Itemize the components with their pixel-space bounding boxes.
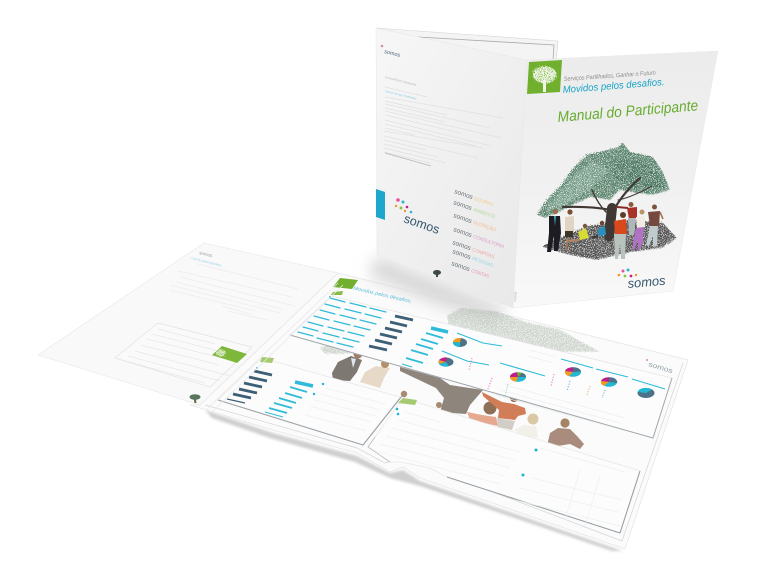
card lower edge	[290, 335, 672, 438]
somos list: somos CONTAS	[450, 260, 491, 280]
panel: upper card	[290, 291, 674, 438]
icon: small tree	[190, 394, 200, 403]
green tag	[260, 357, 274, 363]
cover text: A excelência é conquista	[385, 75, 417, 87]
chart heading rules	[442, 333, 665, 389]
dark bar chart	[369, 316, 413, 350]
spine text: somos	[513, 291, 518, 302]
left flap	[38, 243, 338, 405]
person: woman in purple	[632, 210, 645, 250]
somos list: somos CONSULTORIA	[452, 226, 506, 251]
card text lines	[305, 388, 385, 431]
pie chart 4	[565, 367, 581, 377]
hand peeking under card	[463, 479, 467, 483]
pie chart 6	[638, 388, 654, 398]
bullets	[396, 408, 538, 476]
green logo	[333, 278, 358, 289]
folder shadow	[205, 410, 623, 551]
standing folder	[376, 28, 718, 308]
shadow cast by standing folder	[368, 255, 510, 320]
green tag	[331, 291, 343, 295]
inside people left	[332, 350, 390, 388]
somos list: somos AMBIENTE	[452, 199, 497, 221]
mini logo: somos	[647, 361, 674, 375]
green label	[212, 346, 247, 363]
open folder	[38, 243, 688, 551]
inner page rule	[418, 37, 554, 60]
hand details	[401, 391, 442, 408]
faded tree trunk	[400, 367, 483, 414]
logo tree	[216, 350, 226, 356]
table lines	[375, 412, 625, 526]
card lower edge	[368, 437, 390, 462]
somos list	[450, 188, 506, 280]
pie chart 3	[510, 372, 526, 382]
logo: somos	[199, 250, 214, 258]
heading: Caros participantes,	[191, 256, 223, 268]
panel: left flap card	[115, 323, 252, 387]
pie chart 5	[601, 377, 617, 387]
somos list: somos EQUIPAS	[453, 188, 495, 208]
bullets	[256, 367, 324, 395]
cyan bar chart	[265, 382, 313, 417]
person: woman in skirt	[565, 209, 574, 250]
credit line	[385, 153, 431, 166]
tree canopy	[537, 143, 670, 218]
spine creases	[206, 283, 343, 412]
tagline: Serviços Partilhados, Ganhar o Futuro	[564, 70, 656, 83]
faded tree canopy	[320, 308, 600, 354]
pie chart 1	[453, 338, 467, 347]
headline: Movidos pelos desafios.	[562, 77, 665, 96]
cyan bar chart	[402, 328, 448, 367]
panel: back cover	[376, 28, 527, 308]
tree trunk and branches	[563, 178, 652, 236]
mini logo	[646, 359, 674, 375]
logo somos: somos	[402, 212, 441, 237]
tree mark	[433, 270, 441, 277]
cover text	[385, 75, 417, 101]
right inside panel	[190, 273, 688, 549]
green logo square	[527, 60, 562, 94]
man in brown	[547, 418, 584, 449]
logo word: somos	[627, 273, 667, 291]
title: Manual do Participante	[557, 97, 699, 126]
bullet	[329, 296, 331, 298]
card lower edge	[218, 396, 402, 445]
dark bar chart	[227, 371, 272, 403]
cover text: Somos Serviços Partilhados	[385, 89, 417, 101]
man in orange	[482, 392, 526, 430]
body lines	[170, 264, 298, 320]
woman in white	[514, 414, 538, 438]
white tree	[533, 66, 557, 92]
somos list: somos COMPRAS	[451, 239, 496, 261]
panel: lower left card	[218, 357, 402, 445]
green tag	[398, 398, 417, 405]
person: man in suit	[547, 209, 561, 252]
small legends	[469, 358, 605, 398]
woman in cream	[360, 360, 390, 388]
logo dots	[618, 268, 637, 277]
person: man in red	[617, 202, 637, 235]
panel: lower right card	[368, 398, 640, 533]
somos logo	[618, 268, 667, 291]
reclining woman in orange	[467, 402, 498, 426]
card text lines	[495, 350, 625, 428]
person: seated in yellow	[566, 224, 589, 241]
logo dots	[395, 198, 412, 213]
inner page	[376, 28, 558, 62]
panel: front cover	[513, 51, 718, 308]
man in grey suit	[332, 350, 362, 381]
small logo: somos	[384, 49, 401, 59]
page heading: Movidos pelos desafios.	[353, 286, 412, 305]
text lines	[384, 87, 503, 163]
card right edge	[447, 471, 640, 533]
pie chart 2	[438, 357, 454, 367]
pocket inner line	[205, 363, 683, 541]
card text lines	[122, 329, 230, 383]
person: seated in blue	[592, 221, 606, 238]
person: man in orange	[614, 212, 627, 259]
top page logo block	[333, 278, 412, 305]
ground shadow	[542, 220, 677, 260]
inside people right	[463, 392, 584, 483]
cyan tab	[376, 189, 385, 220]
somos list: somos PESSOAS	[451, 248, 495, 269]
left flap letter	[170, 250, 298, 320]
table of cyan bars	[298, 298, 386, 347]
person: man in brown	[646, 204, 663, 247]
somos list: somos NUTRIÇÃO	[452, 212, 497, 234]
small logo	[381, 45, 401, 59]
